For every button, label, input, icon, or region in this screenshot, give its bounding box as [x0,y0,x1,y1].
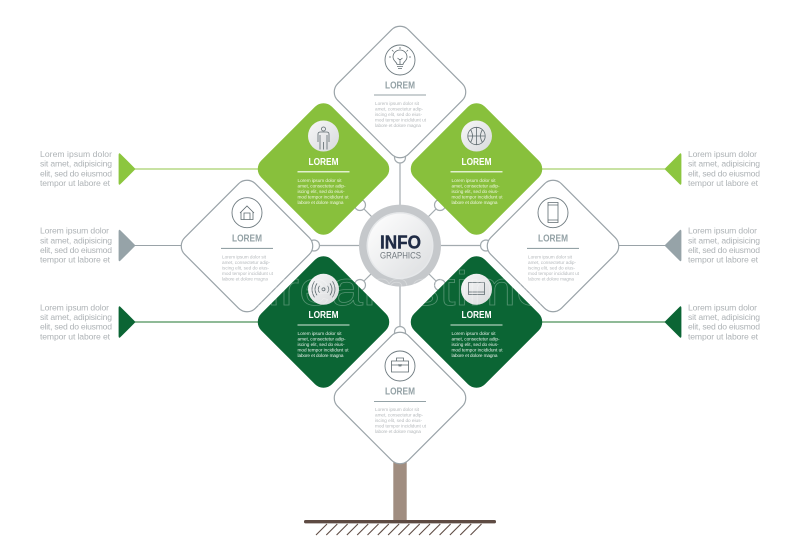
side text: left bottom: elit, sed do eiusmod [40,322,112,332]
body text [298,178,349,205]
body text: Lorem ipsum dolor sit [375,101,420,106]
body text: iscing elit, sed do eius- [222,265,269,270]
body text: labore et dolore magna [528,276,574,281]
leader line: light green right [541,168,665,170]
body text: iscing elit, sed do eius- [298,189,345,194]
panel: light green right diamond [406,98,547,240]
side text: left top: Lorem ipsum dolor [40,149,112,159]
heading: LOREM [308,157,338,168]
body text: amet, consectetur adip- [222,260,270,265]
side text: left middle: Lorem ipsum dolor [40,226,109,236]
body text: mod tempor incididunt ut [375,118,427,122]
body text: mod tempor incididunt ut [375,424,427,428]
side text: left top [40,149,112,188]
leader line: dark green left [135,321,259,323]
body text: amet, consectetur adip- [375,412,423,418]
side text: left middle [40,226,112,265]
side text: left top: tempor ut labore et [40,178,111,188]
side text: right middle: Lorem ipsum dolor [688,226,757,236]
body text: labore et dolore magna [452,353,498,358]
side text: right middle [688,226,760,265]
side text: left bottom: tempor ut labore et [40,331,111,341]
body text: mod tempor incididunt ut [528,271,580,276]
heading: LOREM [462,157,492,168]
side text: left bottom [40,302,112,341]
body text: mod tempor incididunt ut [298,194,349,199]
center badge: Info Graphics [359,205,441,287]
side text: left top: sit amet, adipisicing [40,159,112,169]
side text: right bottom: Lorem ipsum dolor [688,302,757,312]
body text: labore et dolore magna [298,353,344,358]
panel: top white diamond [329,21,471,163]
title: INFO [380,232,421,252]
panel: dark green right diamond [406,251,547,393]
side text: right top: tempor ut labore et [688,178,759,188]
body text: amet, consectetur adip- [452,336,500,342]
heading: LOREM [232,234,262,244]
side text: left bottom: sit amet, adipisicing [40,312,112,322]
panel: left white diamond [176,175,318,317]
side text: left middle: elit, sed do eiusmod [40,245,112,255]
arrow: light green left [119,154,135,184]
body text: Lorem ipsum dolor sit [452,331,496,336]
body text [298,331,349,358]
body text [375,101,427,128]
side text: right top: elit, sed do eiusmod [688,168,760,178]
side text: right top: sit amet, adipisicing [688,159,760,169]
watermark: dreamstime [248,263,548,316]
side text: right top: Lorem ipsum dolor [688,149,757,159]
heading: LOREM [462,310,492,321]
heading: LOREM [538,234,568,244]
body text: iscing elit, sed do eius- [375,112,422,117]
body text [452,331,503,358]
panel: light green left diamond [253,98,394,240]
icon: house [232,198,262,228]
icon: basketball [461,120,492,152]
body text: iscing elit, sed do eius- [452,189,499,194]
side text: right bottom: elit, sed do eiusmod [688,322,760,332]
panel: bottom white diamond [329,327,471,469]
body text: Lorem ipsum dolor sit [298,178,342,183]
side text: left top: elit, sed do eiusmod [40,168,112,178]
heading: LOREM [385,386,415,397]
body text: iscing elit, sed do eius- [452,342,499,347]
body text: mod tempor incididunt ut [222,271,274,276]
icon: laptop [461,274,492,305]
icon: smartphone [538,198,568,228]
leader line: grey left [135,244,182,246]
body text: amet, consectetur adip- [298,183,346,188]
side text: right middle: tempor ut labore et [688,255,759,265]
side text: right middle: elit, sed do eiusmod [688,245,760,255]
body text: labore et dolore magna [452,200,498,205]
arrow: grey left [119,230,135,261]
body text [375,407,427,434]
side text: right bottom: tempor ut labore et [688,331,759,341]
arrow: light green right [665,154,681,184]
leader line: dark green right [541,321,665,323]
body text [452,178,503,205]
body text [222,254,274,281]
side text: left bottom: Lorem ipsum dolor [40,302,109,312]
body text: Lorem ipsum dolor sit [222,254,267,259]
subtitle: GRAPHICS [380,250,421,261]
arrow: dark green left [119,307,135,337]
side text: right middle: sit amet, adipisicing [688,235,760,245]
side text: right top [688,149,760,188]
body text: mod tempor incididunt ut [452,348,503,352]
leader line: grey right [618,244,665,246]
leader line: light green left [135,168,259,170]
body text: amet, consectetur adip- [528,260,576,265]
side text: right bottom: sit amet, adipisicing [688,312,760,322]
body text: mod tempor incididunt ut [452,194,503,199]
body text: amet, consectetur adip- [298,336,346,342]
body text: mod tempor incididunt ut [298,348,349,352]
body text: iscing elit, sed do eius- [298,342,345,347]
heading: LOREM [308,310,338,321]
side text: right bottom [688,302,760,341]
body text: iscing elit, sed do eius- [375,418,422,423]
body text: iscing elit, sed do eius- [528,265,575,270]
body text: labore et dolore magna [298,200,344,205]
body text: Lorem ipsum dolor sit [528,254,573,259]
body text: Lorem ipsum dolor sit [298,331,342,336]
tree trunk [393,462,407,522]
icon: person [308,120,339,152]
panel: right white diamond [482,175,624,317]
body text: labore et dolore magna [375,429,421,434]
heading: LOREM [385,80,415,91]
branch connectors [308,152,492,338]
arrow: grey right [665,230,681,261]
icon: briefcase [385,351,415,381]
panel: dark green left diamond [253,251,394,393]
body text [528,254,580,281]
arrow: dark green right [665,307,681,337]
side text: left middle: sit amet, adipisicing [40,235,112,245]
body text: Lorem ipsum dolor sit [375,407,420,412]
side text: left middle: tempor ut labore et [40,255,111,265]
body text: amet, consectetur adip- [452,183,500,188]
ground with hatching [304,520,496,535]
body text: amet, consectetur adip- [375,106,423,112]
icon: signal [308,274,339,305]
body text: labore et dolore magna [222,276,268,281]
body text: Lorem ipsum dolor sit [452,178,496,183]
body text: labore et dolore magna [375,123,421,128]
icon: light bulb [385,45,415,75]
